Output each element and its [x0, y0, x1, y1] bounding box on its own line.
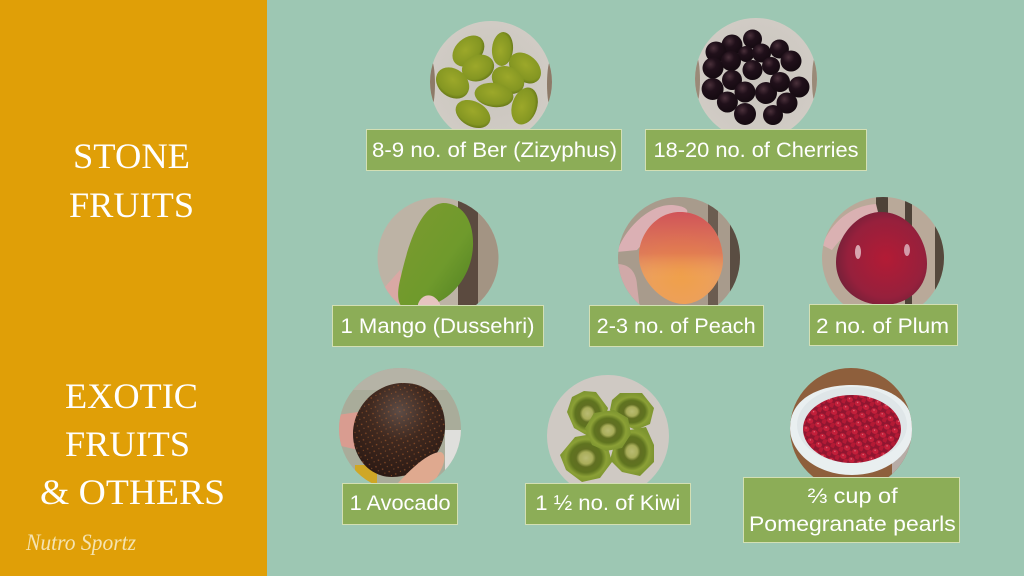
item: cherries [646, 16, 866, 170]
label: pomegranate [744, 478, 960, 542]
heading: exotic fruits and others [40, 376, 225, 512]
photo: cherries on plate [695, 18, 817, 129]
item: plum [810, 196, 958, 346]
item: pomegranate [744, 366, 960, 542]
photo: peach in hand [618, 197, 740, 305]
label: cherries [646, 130, 866, 170]
heading: exotic fruits and others: & OTHERS [40, 472, 225, 512]
item: mango [332, 196, 544, 346]
label: plum [810, 304, 958, 346]
label: peach [590, 306, 764, 346]
photo: ber on plate [430, 21, 552, 129]
brand signature: Nutro Sportz [25, 530, 136, 555]
photo: avocado in hand [339, 368, 461, 483]
label: mango [332, 306, 544, 346]
label: peach: 2-3 no. of Peach [597, 315, 756, 338]
label: avocado: 1 Avocado [350, 492, 451, 515]
label: pomegranate: Pomegranate pearls [749, 513, 956, 536]
heading: stone fruits: STONE [73, 136, 190, 176]
item: peach [590, 196, 764, 346]
label: avocado [342, 484, 458, 524]
heading: stone fruits: FRUITS [69, 185, 194, 225]
label: ber: 8-9 no. of Ber (Zizyphus) [372, 139, 617, 162]
heading: exotic fruits and others: FRUITS [65, 424, 190, 464]
item: ber [366, 19, 622, 170]
photo: kiwi slices on plate [547, 375, 669, 483]
heading: stone fruits [69, 136, 194, 225]
photo: pomegranate pearls in bowl [790, 368, 912, 477]
item: avocado [337, 366, 463, 524]
label: cherries: 18-20 no. of Cherries [654, 139, 858, 162]
photo: plum in hand [822, 197, 944, 304]
label: mango: 1 Mango (Dussehri) [340, 315, 534, 338]
label: plum: 2 no. of Plum [816, 315, 949, 338]
item: kiwi [526, 373, 690, 524]
label: kiwi [526, 484, 690, 524]
label: pomegranate: ⅔ cup of [808, 485, 898, 508]
heading: exotic fruits and others: EXOTIC [65, 376, 198, 416]
label: ber [366, 130, 622, 170]
label: kiwi: 1 ½ no. of Kiwi [535, 492, 680, 515]
photo: mango in hand [378, 198, 498, 305]
panel: category sidebar [0, 0, 267, 576]
